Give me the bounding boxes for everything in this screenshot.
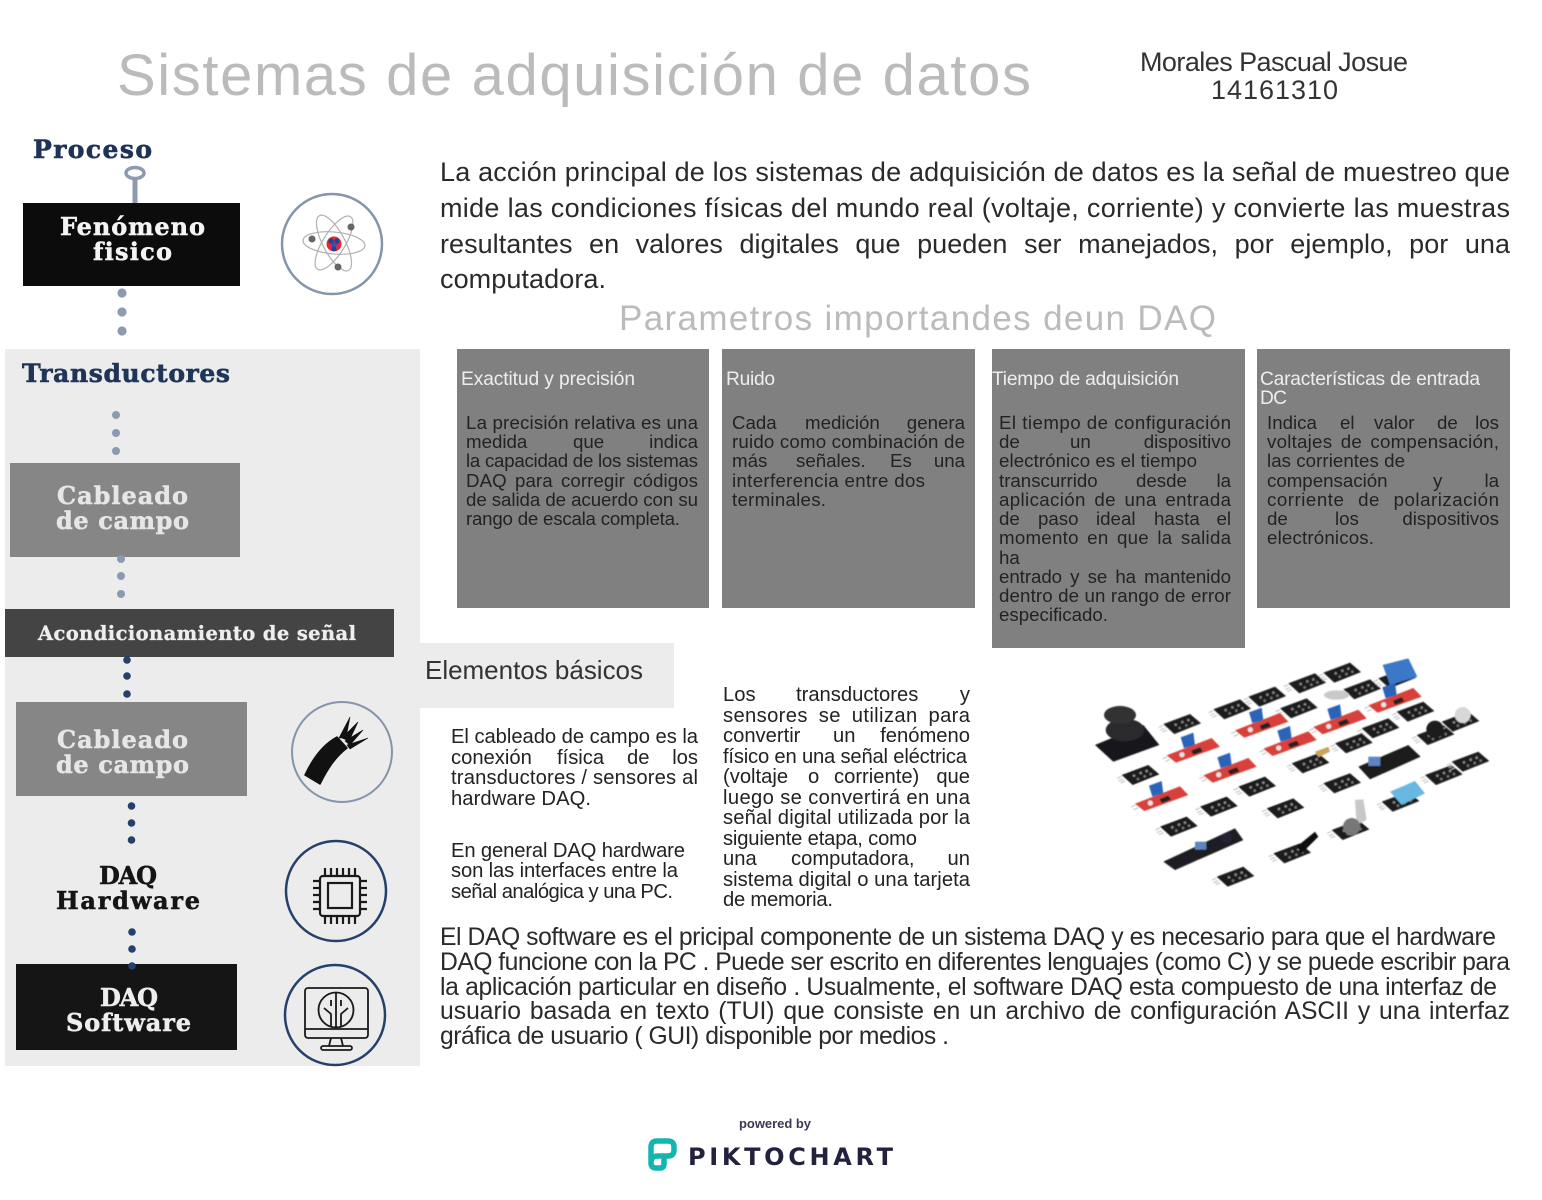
panel: Características de entrada DC: corriente de polarización	[1267, 489, 1499, 510]
text: transductores y sensores: transductores	[796, 684, 918, 706]
text: transductores y sensores: convertir	[723, 725, 801, 747]
panel: Tiempo de adquisición: entrado y se ha mantenido	[999, 566, 1231, 587]
text: cableado de campo: transductores / sensores al	[451, 767, 698, 789]
text: transductores y sensores: o	[808, 766, 819, 788]
dots	[123, 656, 131, 698]
text: DAQ hardware: En general DAQ hardware	[451, 840, 685, 862]
text: transductores y sensores: que	[936, 766, 970, 788]
connector ring	[126, 168, 144, 204]
panel: Tiempo de adquisición: especificado.	[999, 604, 1108, 625]
panel: Características de entrada DC: voltajes de compensación,	[1267, 431, 1499, 452]
panel: Tiempo de adquisición	[992, 349, 1245, 648]
panel: Ruido: Cada	[732, 412, 777, 433]
text: cableado de campo: hardware DAQ.	[451, 788, 591, 810]
dots	[128, 802, 135, 844]
panel: Características de entrada DC: Indica	[1267, 412, 1317, 433]
panel: Exactitud y precisión: rango de escala completa.	[466, 508, 680, 529]
panel: Características de entrada DC: los	[1475, 412, 1499, 433]
box: Fenómeno físico	[23, 203, 240, 286]
box: DAQ Software: Software	[66, 1008, 191, 1037]
box: DAQ Software	[16, 962, 237, 1050]
panel: Características de entrada DC: valor	[1374, 412, 1415, 433]
panel: Tiempo de adquisición: paso	[1038, 508, 1079, 529]
panel: Tiempo de adquisición: aplicación de una entrada	[999, 489, 1232, 510]
panel: Tiempo de adquisición: de	[999, 431, 1020, 452]
box: Cableado de campo	[10, 463, 240, 557]
panel: Ruido: una	[934, 450, 966, 471]
dots	[112, 411, 120, 455]
logo: Piktochart wordmark: PIKTOCHART	[688, 1143, 894, 1171]
panel: Ruido: señales.	[796, 450, 866, 471]
text: DAQ hardware: señal analógica y una PC.	[451, 881, 673, 903]
intro paragraph	[440, 157, 1511, 294]
panel: Características de entrada DC: electrónicos.	[1267, 527, 1374, 548]
panel: Tiempo de adquisición: la	[1216, 470, 1232, 491]
panel: Tiempo de adquisición: hasta	[1154, 508, 1200, 529]
dots	[117, 555, 125, 598]
text: transductores y sensores: un	[833, 725, 855, 747]
body paragraph: DAQ software: El DAQ software es el pricipal componente de un sistema DAQ y es necesario para que el hardware	[440, 924, 1496, 951]
heading: Elementos básicos	[420, 643, 674, 708]
panel: Tiempo de adquisición: electrónico es el tiempo	[999, 450, 1197, 471]
panel: Exactitud y precisión: DAQ para corregir códigos	[466, 470, 698, 491]
body paragraph: DAQ software	[440, 924, 1510, 1050]
heading: Elementos básicos: Elementos básicos	[425, 655, 643, 685]
panel: Tiempo de adquisición: Tiempo de adquisición	[992, 369, 1179, 390]
box: Cableado de campo 2: Cableado	[57, 725, 188, 754]
panel: Exactitud y precisión: la capacidad de los sistemas	[466, 450, 698, 471]
panel: Ruido: terminales.	[732, 489, 826, 510]
panel: Ruido: Es	[890, 450, 912, 471]
intro paragraph: mide las condiciones físicas del mundo real (voltaje, corriente) y convierte las muestras	[440, 193, 1510, 223]
panel: Características de entrada DC: compensación	[1267, 470, 1388, 491]
intro paragraph: resultantes en valores digitales que pueden ser manejados, por ejemplo, por una	[440, 229, 1511, 259]
text: transductores y sensores: Los	[723, 684, 756, 706]
image: sensor modules	[1095, 658, 1489, 887]
box: Cableado de campo 2: de campo	[56, 750, 189, 779]
icon: chip	[286, 841, 386, 941]
icon: monitor	[285, 965, 385, 1065]
panel: Tiempo de adquisición: de	[999, 508, 1020, 529]
label: DAQ Hardware	[56, 861, 200, 915]
panel: Ruido: Ruido	[726, 369, 775, 390]
text: transductores y sensores: fenómeno	[880, 725, 970, 747]
panel: Exactitud y precisión: de salida de acuerdo con su	[466, 489, 698, 510]
panel: Exactitud y precisión: que	[573, 431, 604, 452]
text: cableado de campo: conexión	[451, 747, 532, 769]
text: transductores y sensores: computadora,	[791, 848, 914, 870]
text: cableado de campo	[451, 726, 699, 810]
panel: Exactitud y precisión: La precisión relativa es una	[466, 412, 699, 433]
text: cableado de campo: los	[672, 747, 698, 769]
panel: Exactitud y precisión: Exactitud y precisión	[461, 369, 635, 390]
panel: Exactitud y precisión: indica	[649, 431, 699, 452]
panel: Tiempo de adquisición: el	[1216, 508, 1231, 529]
box: Fenómeno físico: fisico	[93, 237, 172, 266]
panel: Características de entrada DC: y	[1433, 470, 1443, 491]
panel: Ruido: medición	[805, 412, 880, 433]
text: transductores y sensores: un	[948, 848, 970, 870]
text: DAQ hardware	[451, 840, 685, 903]
intro paragraph: La acción principal de los sistemas de adquisición de datos es la señal de muestreo que	[440, 157, 1510, 187]
text: cableado de campo: física	[557, 747, 605, 769]
panel: Características de entrada DC: de	[1437, 412, 1458, 433]
panel: Tiempo de adquisición: ideal	[1096, 508, 1135, 529]
text: transductores y sensores: siguiente etapa, como	[723, 828, 917, 850]
panel: Exactitud y precisión: medida	[466, 431, 528, 452]
box: Cableado de campo: de campo	[56, 506, 189, 535]
text: transductores y sensores: de memoria.	[723, 889, 833, 911]
text: transductores y sensores: luego se convertirá en una	[723, 787, 971, 809]
text: transductores y sensores: sistema digital o una tarjeta	[723, 869, 971, 891]
panel: Ruido: genera	[907, 412, 966, 433]
body paragraph: DAQ software: la aplicación particular en diseño . Usualmente, el software DAQ esta compuesto de una interfaz de	[440, 974, 1497, 1001]
icon: cable	[292, 702, 392, 802]
panel: Tiempo de adquisición: un	[1070, 431, 1091, 452]
box: Fenómeno físico: Fenómeno	[60, 212, 205, 241]
heading: Proceso: Proceso	[33, 135, 152, 164]
text: transductores y sensores: una	[723, 848, 757, 870]
panel: Tiempo de adquisición: momento en que la salida	[999, 527, 1232, 548]
title: Sistemas de adquisición de datos	[117, 43, 1031, 108]
dots	[117, 288, 127, 336]
author: 14161310	[1211, 75, 1338, 105]
text: cableado de campo: El cableado de campo es la	[451, 726, 699, 748]
text: transductores y sensores	[723, 684, 971, 911]
text: cableado de campo: de	[627, 747, 649, 769]
panel: Exactitud y precisión	[457, 349, 709, 608]
box: DAQ Software: DAQ	[100, 983, 158, 1012]
label: DAQ Hardware: Hardware	[56, 886, 200, 915]
panel: Tiempo de adquisición: El tiempo de configuración	[999, 412, 1231, 433]
footer: powered by: powered by	[739, 1116, 812, 1131]
box: Acondicionamiento de señal: Acondicionamiento de señal	[37, 622, 356, 645]
panel: proceso background	[5, 349, 420, 1066]
dots	[128, 928, 136, 953]
heading: Transductores: Transductores	[22, 359, 230, 388]
panel: Características de entrada DC: el	[1340, 412, 1355, 433]
panel: Tiempo de adquisición: ha	[999, 547, 1020, 568]
panel: Ruido: más	[732, 450, 767, 471]
text: transductores y sensores: corriente)	[834, 766, 919, 788]
panel: Ruido	[722, 349, 975, 608]
body paragraph: DAQ software: gráfica de usuario ( GUI) disponible por medios .	[440, 1023, 949, 1050]
subheading: Parametros importandes deun DAQ	[619, 299, 1216, 338]
panel: Ruido: ruido como combinación de	[732, 431, 965, 452]
text: transductores y sensores: sensores se utilizan para	[723, 705, 971, 727]
text: transductores y sensores: físico en una señal eléctrica	[723, 746, 968, 768]
text: transductores y sensores: (voltaje	[723, 766, 788, 788]
panel: Tiempo de adquisición: dentro de un rango de error	[999, 585, 1231, 606]
text: DAQ hardware: son las interfaces entre la	[451, 860, 679, 882]
author	[1140, 47, 1408, 105]
intro paragraph: computadora.	[440, 264, 606, 294]
panel: Características de entrada DC: los	[1335, 508, 1359, 529]
logo: Piktochart mark	[651, 1141, 674, 1168]
panel: Características de entrada DC: Características de entrada	[1260, 369, 1480, 390]
panel: Tiempo de adquisición: dispositivo	[1144, 431, 1231, 452]
panel: Ruido: interferencia entre dos	[732, 470, 925, 491]
panel: Características de entrada DC: las corrientes de	[1267, 450, 1405, 471]
panel: Características de entrada DC: la	[1484, 470, 1500, 491]
text: transductores y sensores: señal digital utilizada por la	[723, 807, 971, 829]
body paragraph: DAQ software: DAQ funcione con la PC . Puede ser escrito en diferentes lenguajes (como C) y se puede escribir para	[440, 949, 1510, 976]
text: transductores y sensores: y	[960, 684, 971, 706]
panel: Características de entrada DC: de	[1267, 508, 1288, 529]
body paragraph: DAQ software: usuario basada en texto (TUI) que consiste en un archivo de configuración ASCII y una interfaz	[440, 998, 1510, 1025]
box: Cableado de campo: Cableado	[57, 481, 188, 510]
label: DAQ Hardware: DAQ	[99, 861, 157, 890]
box: Acondicionamiento de señal	[5, 609, 394, 657]
author: Morales Pascual Josue	[1140, 47, 1408, 77]
panel: Características de entrada DC: DC	[1260, 388, 1287, 409]
panel: Tiempo de adquisición: transcurrido	[999, 470, 1098, 491]
panel: Tiempo de adquisición: desde	[1136, 470, 1187, 491]
icon: atom	[282, 194, 382, 294]
box: Cableado de campo 2	[16, 702, 247, 796]
panel: Características de entrada DC	[1257, 349, 1510, 608]
panel: Características de entrada DC: dispositivos	[1402, 508, 1499, 529]
